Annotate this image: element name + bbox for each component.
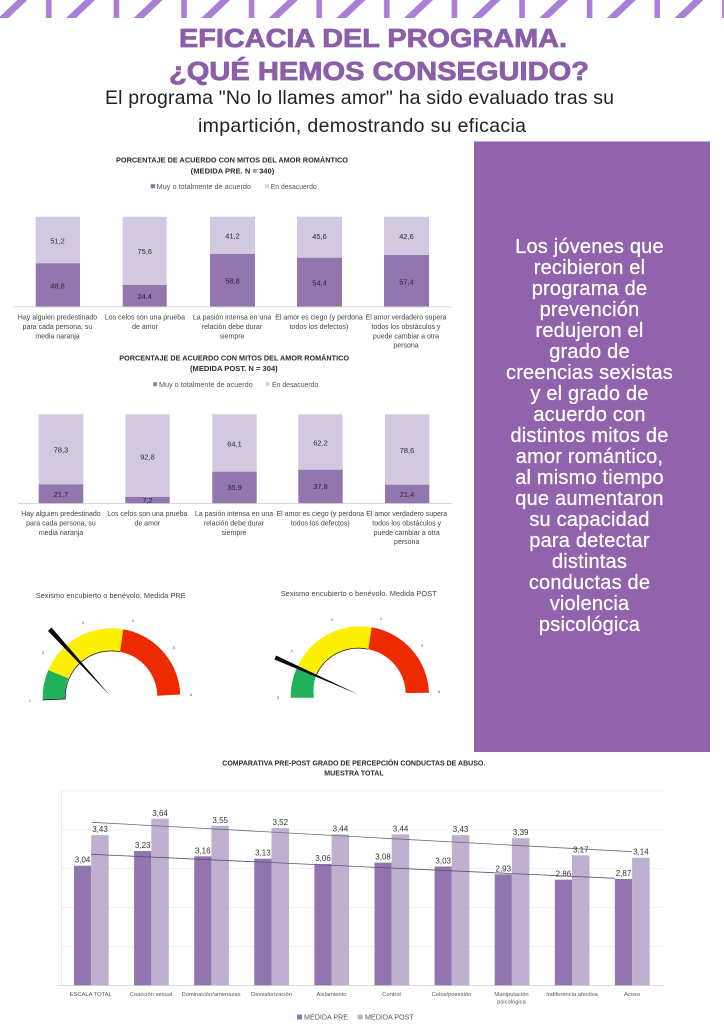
- gauge: sexismo PRE: 6: [190, 692, 193, 697]
- values POST: [54, 438, 414, 505]
- panel: conclusions callout: que aumentaron: [515, 488, 664, 510]
- category labels comparativa: psicológica: [497, 1000, 527, 1006]
- panel: conclusions callout: amor romántico,: [516, 446, 663, 468]
- panel: stacked bar chart PRE: [13, 156, 452, 350]
- panel: conclusions callout: redujeron el: [535, 320, 644, 342]
- category labels PRE: Hay alguien predestinado: [18, 314, 97, 322]
- values PRE: 41,2: [225, 232, 240, 240]
- chart heading POST: [119, 354, 350, 373]
- values POST: 62,2: [313, 438, 328, 448]
- panel: conclusions callout: Los jóvenes que: [515, 236, 664, 258]
- category labels comparativa: Indiferencia afectiva: [546, 992, 599, 998]
- chart heading comparativa: MUESTRA TOTAL: [324, 771, 384, 778]
- gauge: sexismo PRE: 1: [29, 698, 32, 703]
- value labels: 3,03: [435, 856, 452, 866]
- category labels comparativa: Manipulación: [494, 992, 529, 998]
- category labels comparativa: [70, 992, 640, 1006]
- category labels POST: de amor: [134, 520, 161, 528]
- bars comparativa: [74, 819, 650, 985]
- category labels POST: El amor es ciego (y perdona: [277, 511, 364, 518]
- legend POST: En desacuerdo: [272, 382, 318, 389]
- subtitle: [105, 87, 614, 137]
- values PRE: 45,6: [312, 232, 327, 241]
- category labels POST: [21, 511, 447, 546]
- legend comparativa: [297, 1014, 414, 1022]
- legend PRE: Muy o totalmente de acuerdo: [157, 184, 251, 191]
- category labels POST: El amor verdadero supera: [366, 511, 447, 518]
- chart heading PRE: [116, 156, 349, 175]
- panel: comparativa pre-post bar chart: [58, 759, 664, 1022]
- panel: conclusions callout: distintas: [552, 551, 627, 573]
- legend POST: [153, 382, 318, 389]
- values PRE: 42,6: [399, 232, 414, 241]
- chart heading comparativa: [222, 759, 485, 778]
- category labels POST: Los celos son una prueba: [107, 511, 187, 518]
- value labels: 3,14: [633, 848, 649, 857]
- legend comparativa: MEDIDA POST: [365, 1014, 414, 1022]
- value labels: 3,13: [255, 849, 271, 858]
- value labels: 3,04: [75, 856, 91, 865]
- value labels: 3,52: [273, 818, 289, 827]
- category labels PRE: El amor verdadero supera: [366, 314, 447, 322]
- gauge: sexismo POST: 6: [438, 689, 441, 694]
- category labels PRE: El amor es ciego (y perdona: [275, 314, 363, 322]
- legend PRE: En desacuerdo: [271, 184, 317, 191]
- category labels comparativa: Aislamiento: [317, 992, 346, 998]
- title: ¿QUÉ HEMOS CONSEGUIDO?: [169, 56, 589, 86]
- panel: conclusions callout: violencia: [550, 593, 630, 615]
- gauge: sexismo PRE: [29, 591, 193, 703]
- value labels: 3,55: [212, 816, 229, 825]
- legend POST: Muy o totalmente de acuerdo: [159, 382, 253, 389]
- panel: conclusions callout: conductas de: [529, 572, 650, 594]
- gauge: sexismo POST: [274, 589, 441, 700]
- panel: conclusions callout: y el grado de: [530, 383, 649, 405]
- chart heading POST: (MEDIDA POST. N = 304): [190, 366, 278, 373]
- trend lines: [91, 822, 632, 878]
- panel: conclusions callout: su capacidad: [529, 509, 650, 531]
- gauge: sexismo POST: Sexismo encubierto o benévolo. Medida POST: [281, 589, 437, 598]
- gauge: sexismo POST: 5: [421, 643, 424, 648]
- panel: conclusions callout: al mismo tiempo: [515, 467, 664, 489]
- panel: conclusions callout: prevención: [540, 299, 639, 321]
- values POST: 64,1: [227, 440, 242, 448]
- value labels: 3,16: [195, 846, 211, 855]
- values POST: 21,7: [54, 490, 68, 499]
- panel: conclusions callout: [474, 142, 710, 752]
- category labels PRE: para cada persona, su: [23, 324, 92, 331]
- category labels PRE: La pasión intensa en una: [193, 314, 271, 322]
- value labels: 3,64: [152, 809, 168, 818]
- value labels: 2,93: [496, 864, 512, 873]
- values PRE: 51,2: [50, 236, 65, 246]
- title: EFICACIA DEL PROGRAMA.: [179, 23, 567, 53]
- category labels POST: La pasión intensa en una: [195, 511, 273, 518]
- category labels POST: siempre: [222, 530, 247, 537]
- panel: conclusions callout: para detectar: [529, 530, 650, 552]
- values POST: 7,2: [142, 496, 153, 505]
- value labels: 3,43: [92, 825, 108, 834]
- chart heading PRE: (MEDIDA PRE. N = 340): [191, 168, 274, 175]
- subtitle: impartición, demostrando su eficacia: [198, 115, 526, 137]
- value labels: 3,23: [135, 841, 151, 850]
- category labels PRE: Los celos son una prueba: [105, 314, 185, 322]
- value labels: 3,17: [573, 845, 589, 854]
- category labels POST: media naranja: [39, 530, 83, 537]
- category labels comparativa: Acoso: [624, 992, 640, 998]
- category labels comparativa: ESCALA TOTAL: [70, 992, 113, 998]
- value labels: 3,08: [375, 853, 391, 862]
- gauge: sexismo PRE: 4: [132, 618, 135, 623]
- value labels: 3,43: [453, 825, 469, 834]
- panel: conclusions callout: creencias sexistas: [506, 362, 673, 384]
- bars PRE: [13, 217, 452, 307]
- title: [169, 23, 589, 86]
- legend comparativa: MEDIDA PRE: [304, 1014, 348, 1022]
- gauge: sexismo PRE: Sexismo encubierto o benévolo. Medida PRE: [36, 591, 186, 600]
- values POST: 35,9: [227, 483, 242, 492]
- panel: conclusions callout: acuerdo con: [533, 404, 646, 426]
- value labels: 3,44: [333, 824, 349, 833]
- values PRE: 58,8: [225, 276, 240, 286]
- category labels POST: todos los defectos): [291, 520, 350, 528]
- category labels POST: puede cambiar a otra: [374, 530, 440, 537]
- values PRE: 24,4: [138, 292, 152, 301]
- gauge: sexismo POST: 4: [380, 616, 383, 621]
- chart heading POST: PORCENTAJE DE ACUERDO CON MITOS DEL AMOR ROMÁNTICO: [119, 354, 350, 363]
- value labels: 2,87: [616, 869, 632, 878]
- value labels: 2,86: [556, 870, 572, 879]
- panel: conclusions callout: distintos mitos de: [510, 425, 669, 447]
- values POST: 21,4: [400, 490, 414, 499]
- values POST: 37,8: [313, 482, 328, 491]
- chart heading PRE: PORCENTAJE DE ACUERDO CON MITOS DEL AMOR ROMÁNTICO: [116, 156, 349, 165]
- panel: conclusions callout: recibieron el: [534, 257, 645, 279]
- values POST: 78,6: [400, 446, 414, 455]
- chart heading comparativa: COMPARATIVA PRE-POST GRADO DE PERCEPCIÓN CONDUCTAS DE ABUSO.: [222, 759, 485, 768]
- category labels POST: todos los obstáculos y: [372, 520, 442, 528]
- panel: conclusions callout: psicológica: [539, 614, 641, 636]
- value labels: 3,06: [315, 854, 331, 863]
- values PRE: 57,4: [399, 278, 414, 286]
- category labels PRE: [18, 314, 447, 350]
- category labels PRE: puede cambiar a otra: [373, 334, 439, 340]
- gauge: sexismo PRE: 5: [173, 645, 176, 650]
- category labels PRE: relación debe durar: [202, 324, 263, 331]
- top stripe band: [0, 0, 724, 18]
- gauge: sexismo POST: 3: [331, 617, 334, 622]
- category labels POST: Hay alguien predestinado: [21, 511, 101, 518]
- category labels PRE: de amor: [132, 324, 159, 331]
- gauge: sexismo POST: 3: [277, 695, 280, 700]
- category labels PRE: todos los defectos): [290, 324, 348, 331]
- panel: conclusions callout: grado de: [549, 341, 630, 363]
- category labels comparativa: Desvalorización: [251, 992, 292, 998]
- panel: conclusions callout: programa de: [532, 278, 647, 300]
- value labels: [75, 809, 649, 879]
- category labels comparativa: Coacción sexual: [130, 992, 172, 998]
- value labels: 3,39: [513, 828, 529, 837]
- gauge: sexismo PRE: 2: [42, 650, 45, 655]
- gauge: sexismo PRE: 3: [82, 620, 85, 625]
- category labels POST: relación debe durar: [204, 520, 265, 528]
- panel: stacked bar chart POST: [18, 354, 452, 546]
- values POST: 92,8: [140, 452, 155, 462]
- category labels comparativa: Dominación/amenazas: [182, 992, 241, 998]
- values PRE: 48,8: [50, 282, 65, 290]
- values PRE: [50, 232, 414, 301]
- category labels PRE: siempre: [220, 334, 245, 340]
- values POST: 78,3: [54, 446, 68, 454]
- values PRE: 54,4: [312, 278, 327, 288]
- category labels PRE: todos los obstáculos y: [372, 324, 441, 331]
- value labels: 3,44: [393, 824, 409, 833]
- values PRE: 75,6: [138, 247, 152, 256]
- legend PRE: [151, 184, 317, 191]
- category labels comparativa: Celos/posesión: [432, 992, 471, 998]
- category labels POST: persona: [394, 539, 419, 546]
- subtitle: El programa "No lo llames amor" ha sido evaluado tras su: [105, 87, 614, 109]
- category labels PRE: persona: [393, 342, 419, 350]
- category labels POST: para cada persona, su: [26, 520, 96, 528]
- category labels PRE: media naranja: [35, 334, 80, 340]
- bars POST: [18, 414, 452, 504]
- category labels comparativa: Control: [382, 992, 401, 998]
- gauge: sexismo POST: 2: [291, 648, 294, 653]
